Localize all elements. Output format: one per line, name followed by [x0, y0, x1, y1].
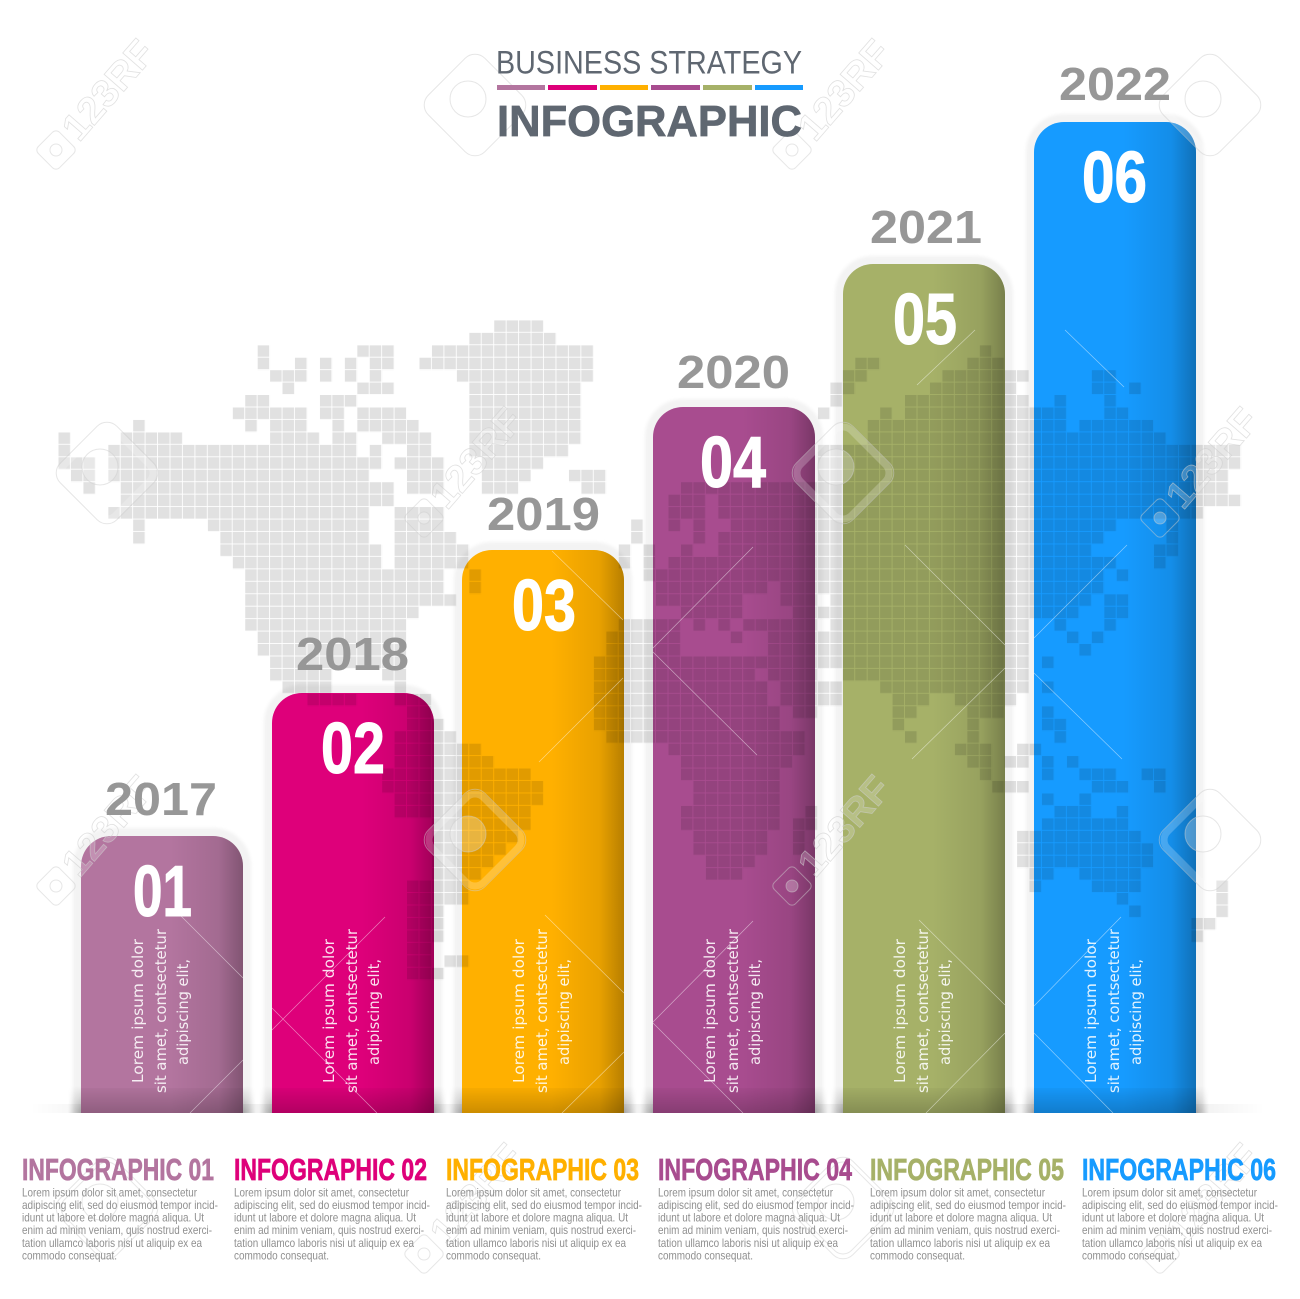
footer column 03: enim ad minim veniam, quis nostrud exerci-: [446, 1223, 636, 1237]
footer column 03: [446, 1152, 642, 1262]
watermark logos: 123RF: [790, 32, 899, 149]
rotated bar text 04: sit amet, contsectetur: [724, 928, 742, 1093]
footer column 05: idunt ut labore et dolore magna aliqua. Ut: [870, 1210, 1053, 1224]
footer column 01: idunt ut labore et dolore magna aliqua. Ut: [22, 1210, 205, 1224]
footer column 03: INFOGRAPHIC 03: [446, 1152, 639, 1187]
footer column 05: enim ad minim veniam, quis nostrud exerci-: [870, 1223, 1060, 1237]
footer column 02: tation ullamco laboris nisi ut aliquip ex ea: [234, 1236, 414, 1250]
bar numbers: 05: [893, 280, 957, 360]
watermark logos: 123RF: [422, 1136, 531, 1253]
rotated bar text 06: [1082, 928, 1145, 1093]
footer column 01: [22, 1152, 218, 1262]
footer column 06: [1082, 1152, 1278, 1262]
footer column 04: INFOGRAPHIC 04: [658, 1152, 853, 1187]
footer column 02: idunt ut labore et dolore magna aliqua. Ut: [234, 1210, 417, 1224]
rotated bar text 02: adipiscing elit,: [365, 959, 383, 1065]
footer column 04: commodo consequat.: [658, 1248, 753, 1262]
year labels: 2018: [296, 628, 409, 680]
bar 06: [1034, 122, 1196, 1113]
footer column 05: [870, 1152, 1066, 1262]
title colour strips: [497, 85, 803, 90]
footer column 06: Lorem ipsum dolor sit amet, consectetur: [1082, 1186, 1257, 1200]
year labels: 2017: [105, 773, 217, 825]
bar 02: [272, 693, 434, 1113]
footer column 03: adipiscing elit, sed do eiusmod tempor incid-: [446, 1198, 642, 1212]
bar 03: [462, 550, 624, 1113]
watermark logos: 123RF: [54, 32, 163, 149]
rotated bar text 01: sit amet, contsectetur: [152, 928, 170, 1093]
bar 04: [653, 407, 815, 1113]
bar halos: [81, 122, 1196, 1113]
year labels: [105, 58, 1171, 825]
footer column 02: adipiscing elit, sed do eiusmod tempor incid-: [234, 1198, 430, 1212]
rotated bar text 02: [320, 928, 383, 1093]
watermark logos: 123RF: [790, 768, 899, 885]
title: [496, 44, 803, 146]
footer column 02: Lorem ipsum dolor sit amet, consectetur: [234, 1186, 409, 1200]
year labels: 2019: [487, 488, 600, 540]
footer column 05: INFOGRAPHIC 05: [870, 1152, 1064, 1187]
year labels: 2020: [677, 346, 790, 398]
footer column 05: tation ullamco laboris nisi ut aliquip ex ea: [870, 1236, 1050, 1250]
rotated bar text 04: [701, 928, 764, 1093]
rotated bar text 05: adipiscing elit,: [936, 959, 954, 1065]
rotated bar text 01: Lorem ipsum dolor: [129, 938, 147, 1083]
bar numbers: [133, 138, 1147, 932]
footer column 02: INFOGRAPHIC 02: [234, 1152, 427, 1187]
watermark logos: 123RF: [1158, 400, 1267, 517]
rotated bar text 06: Lorem ipsum dolor: [1082, 938, 1100, 1083]
footer column 05: Lorem ipsum dolor sit amet, consectetur: [870, 1186, 1045, 1200]
footer column 02: commodo consequat.: [234, 1248, 329, 1262]
footer column 01: enim ad minim veniam, quis nostrud exerci-: [22, 1223, 212, 1237]
rotated bar text 01: adipiscing elit,: [174, 959, 192, 1065]
watermark logos: 123RF: [54, 768, 163, 885]
dotted world map: [58, 320, 1241, 980]
footer column 05: adipiscing elit, sed do eiusmod tempor incid-: [870, 1198, 1066, 1212]
watermark logos: 123RF: [422, 400, 531, 517]
footer column 03: Lorem ipsum dolor sit amet, consectetur: [446, 1186, 621, 1200]
year labels: 2021: [870, 201, 982, 253]
footer column 06: idunt ut labore et dolore magna aliqua. Ut: [1082, 1210, 1265, 1224]
rotated bar text 02: Lorem ipsum dolor: [320, 938, 338, 1083]
footer column 01: adipiscing elit, sed do eiusmod tempor incid-: [22, 1198, 218, 1212]
footer column 04: [658, 1152, 854, 1262]
bar numbers: 01: [133, 852, 192, 932]
bar numbers: 04: [700, 423, 766, 503]
footer column 03: tation ullamco laboris nisi ut aliquip ex ea: [446, 1236, 626, 1250]
footer column 06: tation ullamco laboris nisi ut aliquip ex ea: [1082, 1236, 1262, 1250]
rotated bar text 06: adipiscing elit,: [1127, 959, 1145, 1065]
footer column 02: [234, 1152, 430, 1262]
rotated bar text 05: sit amet, contsectetur: [914, 928, 932, 1093]
watermark hairlines: [175, 330, 1127, 1113]
footer column 06: commodo consequat.: [1082, 1248, 1177, 1262]
title line: business strategy: BUSINESS STRATEGY: [496, 44, 802, 80]
footer column 04: tation ullamco laboris nisi ut aliquip ex ea: [658, 1236, 838, 1250]
footer column 04: adipiscing elit, sed do eiusmod tempor incid-: [658, 1198, 854, 1212]
footer column 01: commodo consequat.: [22, 1248, 117, 1262]
footer column 04: Lorem ipsum dolor sit amet, consectetur: [658, 1186, 833, 1200]
rotated bar text 03: [510, 928, 573, 1093]
bar numbers: 03: [512, 566, 576, 646]
bar 01: [81, 836, 243, 1113]
rotated bar text 06: sit amet, contsectetur: [1105, 928, 1123, 1093]
rotated bar text 02: sit amet, contsectetur: [343, 928, 361, 1093]
rotated bar text 01: [129, 928, 192, 1093]
rotated bar text 05: [891, 928, 954, 1093]
rotated bar text 03: Lorem ipsum dolor: [510, 938, 528, 1083]
rotated bar text 03: sit amet, contsectetur: [533, 928, 551, 1093]
footer column 04: idunt ut labore et dolore magna aliqua. Ut: [658, 1210, 841, 1224]
rotated bar text 04: Lorem ipsum dolor: [701, 938, 719, 1083]
floor shadow: [68, 1090, 1224, 1113]
footer column 04: enim ad minim veniam, quis nostrud exerci-: [658, 1223, 848, 1237]
rotated bar text 03: adipiscing elit,: [555, 959, 573, 1065]
bar numbers: 02: [321, 709, 385, 789]
rotated bar text 05: Lorem ipsum dolor: [891, 938, 909, 1083]
footer column 02: enim ad minim veniam, quis nostrud exerci-: [234, 1223, 424, 1237]
footer column 01: INFOGRAPHIC 01: [22, 1152, 214, 1187]
title line: infographic: INFOGRAPHIC: [497, 97, 802, 146]
year labels: 2022: [1059, 58, 1171, 110]
footer column 01: tation ullamco laboris nisi ut aliquip ex ea: [22, 1236, 202, 1250]
footer column 03: idunt ut labore et dolore magna aliqua. Ut: [446, 1210, 629, 1224]
bar numbers: 06: [1082, 138, 1147, 218]
footer column 05: commodo consequat.: [870, 1248, 965, 1262]
watermark logos: 123RF: [1158, 1136, 1267, 1253]
bar 05: [843, 264, 1005, 1113]
footer column 01: Lorem ipsum dolor sit amet, consectetur: [22, 1186, 197, 1200]
footer column 03: commodo consequat.: [446, 1248, 541, 1262]
rotated bar text 04: adipiscing elit,: [746, 959, 764, 1065]
